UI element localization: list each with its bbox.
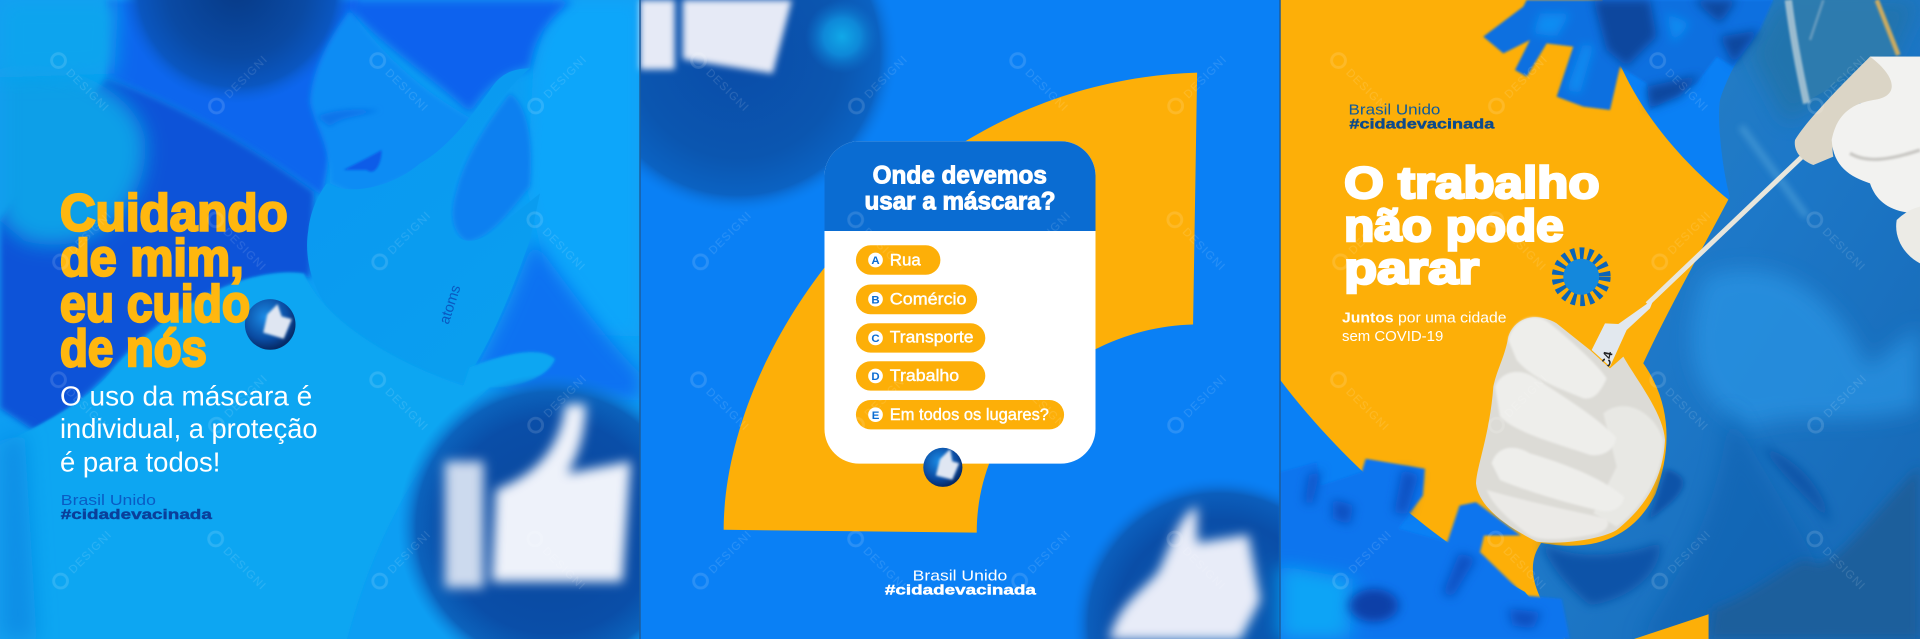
headline: de nós: [60, 320, 207, 378]
subheading: Juntos por uma cidade: [1342, 309, 1507, 326]
blurred face at left: [0, 65, 145, 245]
option D: [856, 361, 985, 391]
sphere: [245, 299, 296, 350]
face shield and gown top: [1785, 0, 1898, 103]
hashtag block: Brasil Unido: [1349, 102, 1440, 118]
option E: Em todos os lugares?: [890, 406, 1049, 424]
sleeve shadow: [1647, 469, 1683, 522]
sphere: [923, 448, 962, 487]
panel 2 background: [640, 0, 1280, 639]
panel dividers: [640, 0, 1280, 639]
mask: [307, 68, 540, 383]
panel: Cuidando de mim: [0, 0, 640, 639]
panel 1 background: [0, 0, 640, 639]
left side fade: [0, 433, 37, 639]
top virus: [1483, 0, 1773, 110]
top right glove: [1795, 57, 1920, 263]
yellow arc shape: [724, 73, 1197, 533]
shield: [1785, 0, 1897, 103]
hair: [350, 0, 573, 113]
small thumbs ball: [923, 448, 962, 487]
bottom virus: [1280, 459, 1570, 639]
option C: C: [871, 333, 880, 345]
dim lower right: [1709, 465, 1920, 639]
headline: Cuidando: [60, 185, 288, 243]
blue curve bottom left: [1280, 380, 1566, 639]
shield reflection: [1810, 0, 1823, 40]
headline: não pode: [1344, 202, 1564, 251]
gown: [1533, 0, 1920, 639]
headline: [1344, 159, 1600, 294]
woman: head, hair, mask: [307, 0, 640, 400]
cyan highlight: [1280, 565, 1353, 639]
subheading: individual, a proteção: [60, 413, 318, 444]
headline: [60, 185, 288, 378]
pocket shadow: [1541, 542, 1660, 605]
body: [1563, 259, 1599, 295]
hashtag block: Brasil Unido: [913, 568, 1007, 584]
ball: [398, 373, 640, 639]
blue curve top right: [1602, 0, 1811, 200]
virus body: [1483, 0, 1773, 110]
ball highlight: [805, 0, 879, 73]
hashtag block: [885, 568, 1036, 598]
card body: [824, 141, 1096, 464]
brow shadow: [317, 109, 380, 127]
option A: Rua: [890, 251, 922, 269]
bottom right thumbs ball: [398, 373, 640, 639]
panel: quiz: [640, 0, 1280, 639]
question: [864, 162, 1056, 215]
glove silhouette: [1476, 317, 1665, 543]
hashtag block: Brasil Unido: [61, 493, 156, 509]
small virus icon: [1558, 254, 1604, 300]
finger two: [1495, 372, 1616, 455]
face: [310, 10, 473, 197]
finger three: [1492, 448, 1624, 511]
swab tube: [1592, 300, 1653, 367]
option B: [856, 284, 977, 314]
fold shadow: [1762, 445, 1831, 525]
lower glove with swab tube: [1476, 300, 1665, 543]
option B: Comércio: [890, 290, 967, 308]
subheading: sem COVID-19: [1342, 328, 1443, 345]
thumb: [1109, 506, 1260, 639]
hashtag block: #cidadevacinada: [885, 582, 1036, 598]
subheading: O uso da máscara é: [60, 380, 312, 411]
option C: Transporte: [890, 328, 973, 346]
watermark: [640, 0, 1280, 639]
subheading: [1342, 309, 1507, 345]
gown body: [1533, 0, 1920, 639]
finger one: [1508, 317, 1607, 399]
thumb up: [445, 404, 631, 588]
eye shadow: [343, 150, 382, 172]
deep blue patch behind neck: [473, 240, 640, 400]
yellow notch at bottom: [1631, 614, 1709, 639]
panel: trabalho: [1280, 0, 1920, 639]
finger four: [1487, 490, 1608, 539]
virus body: [1280, 459, 1570, 639]
deep blue wedge: [0, 78, 314, 433]
mask label: atoms: [437, 283, 464, 326]
dark spots: [1304, 469, 1541, 629]
subheading: é para todos!: [60, 446, 220, 477]
panel 3 background: [1280, 0, 1920, 639]
hashtag block: [61, 493, 212, 522]
option E: [856, 400, 1064, 429]
tube label: C4: [1599, 350, 1616, 369]
top left thumbs ball: [640, 0, 899, 214]
gown light fold: [1692, 270, 1920, 429]
headline: de mim,: [60, 230, 244, 288]
hashtag block: [1349, 102, 1495, 132]
ball: [640, 0, 899, 214]
dark core: [1349, 589, 1398, 622]
beige finger: [1795, 57, 1920, 165]
gown dark fold: [1639, 408, 1827, 639]
hashtag block: #cidadevacinada: [1349, 116, 1495, 132]
option C: [856, 323, 985, 353]
knuckle shadow: [1850, 150, 1920, 159]
thumb: [263, 304, 292, 339]
subheading: [60, 380, 318, 477]
bright patches: [1533, 13, 1690, 93]
headline: parar: [1344, 245, 1479, 294]
strap hole: [453, 93, 531, 242]
lower gown folds: [1541, 445, 1920, 639]
gown dark upper: [1749, 0, 1920, 122]
thumb: [640, 0, 792, 73]
bottom right thumbs ball: [1071, 476, 1280, 639]
shield edge: [1788, 0, 1807, 103]
swab: [1647, 157, 1802, 304]
question: usar a máscara?: [864, 187, 1056, 215]
back of hand: [1593, 406, 1663, 527]
thumb: [936, 449, 959, 480]
right light background: [527, 0, 640, 337]
option D: Trabalho: [890, 367, 959, 385]
card header: [824, 141, 1096, 231]
option B: B: [871, 294, 880, 306]
quiz card: [824, 141, 1096, 464]
question: Onde devemos: [873, 162, 1047, 190]
lower finger: [1896, 207, 1920, 263]
crease along swab: [1741, 127, 1807, 216]
dark patches: [1593, 0, 1760, 108]
spikes: [1558, 254, 1604, 300]
option E: E: [872, 410, 880, 422]
medium blue upper band: [106, 0, 359, 196]
top dark ball: [118, 0, 355, 106]
ball: [1071, 476, 1280, 639]
white hand: [1832, 57, 1920, 213]
small thumbs ball: [245, 299, 296, 350]
option D: D: [871, 371, 880, 383]
option A: [856, 245, 940, 275]
hashtag block: #cidadevacinada: [61, 506, 212, 522]
watermark: [1280, 0, 1920, 639]
blurred shoulder and body: [0, 272, 555, 639]
headline: O trabalho: [1344, 159, 1600, 208]
watermark: [0, 0, 640, 639]
headline: eu cuido: [60, 276, 250, 334]
option A: A: [871, 255, 880, 267]
yellow strap: [1877, 0, 1898, 55]
top left corner glow: [0, 0, 118, 78]
